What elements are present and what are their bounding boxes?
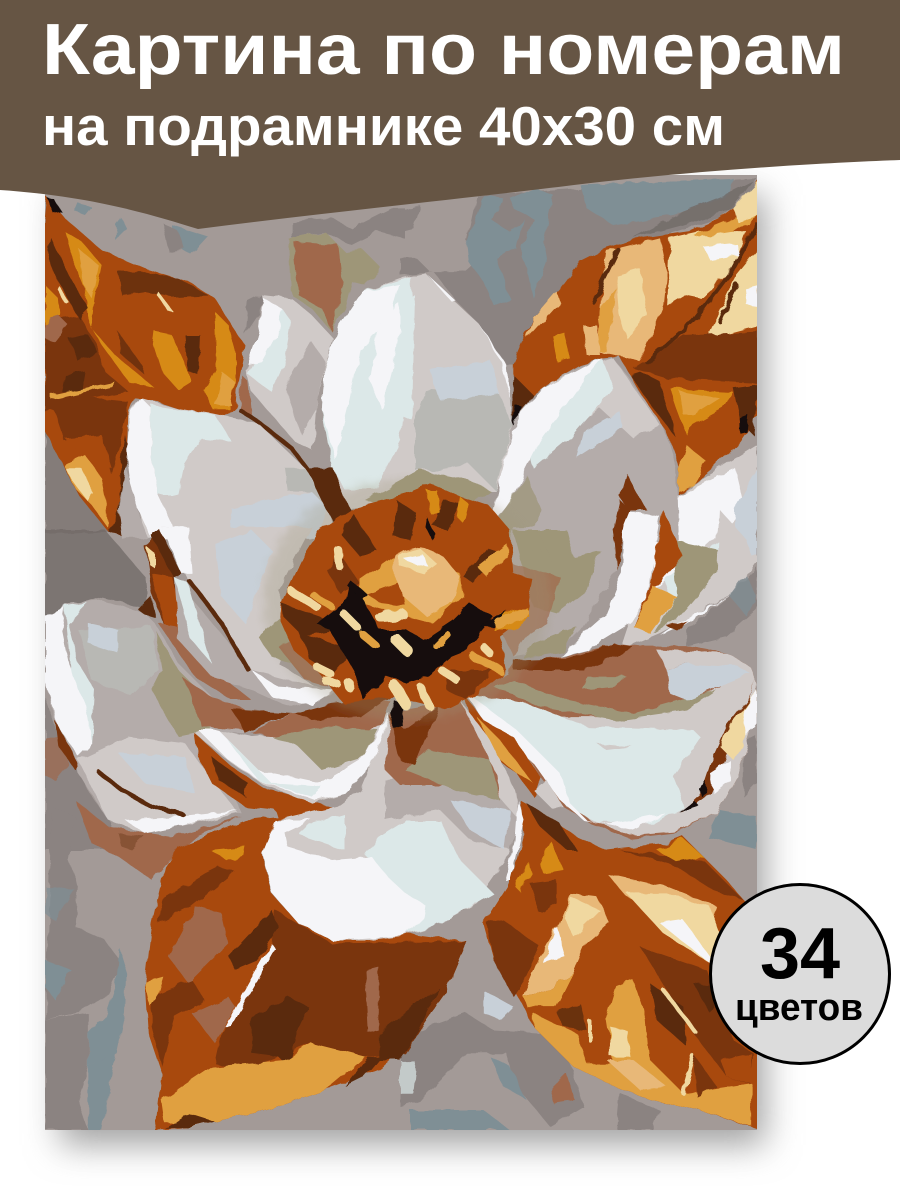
painting background: [30, 160, 770, 1145]
petal: upper right: [490, 358, 678, 542]
canvas shadow: [60, 195, 765, 1145]
petal: upper small: [240, 295, 333, 508]
header banner: [0, 0, 900, 229]
petal: lower left small: [195, 697, 390, 821]
flower centre: stamens: [263, 468, 550, 727]
painting on canvas: [30, 160, 770, 1145]
petal: far left: [45, 597, 292, 833]
title: Картина по номерам: [42, 10, 845, 90]
leaf: bottom left: [145, 817, 467, 1130]
leaf: top right: [512, 180, 758, 495]
subtitle: на подрамнике 40х30 см: [42, 95, 725, 157]
leaf: bottom right: [483, 800, 760, 1130]
leaf: top left: [42, 197, 245, 537]
badge: 34 colours: 34: [760, 914, 840, 994]
petal: bottom centre: [262, 700, 524, 940]
badge: 34 colours: цветов: [735, 987, 863, 1029]
petal: lower right: [460, 643, 757, 838]
badge: 34 colours: [710, 884, 890, 1064]
petal: far right: [620, 445, 757, 650]
petal: upper right white strip: [500, 473, 753, 658]
petal: left large: [118, 398, 335, 707]
petal: top centre: [322, 273, 512, 510]
